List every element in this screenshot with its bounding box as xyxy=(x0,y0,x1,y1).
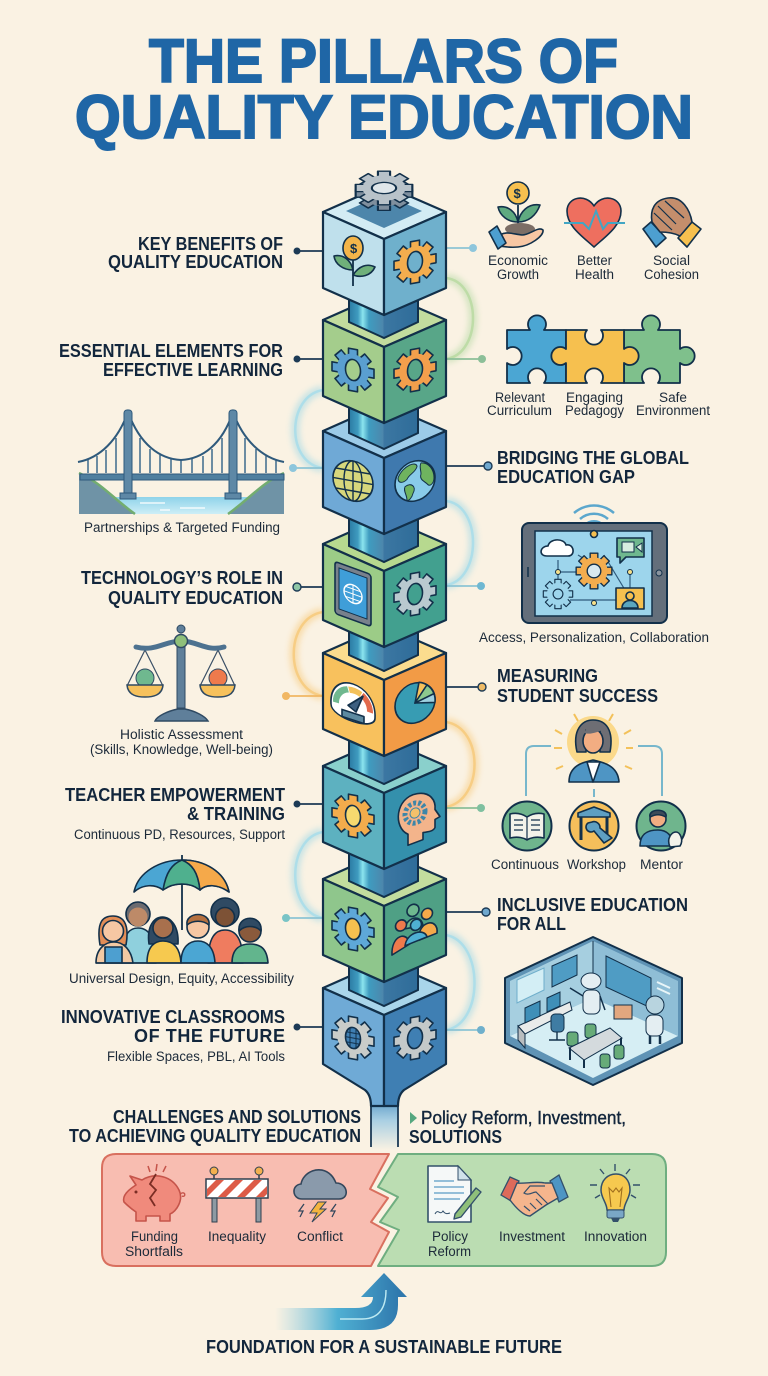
top socket xyxy=(346,194,422,228)
benefit: better health: Health xyxy=(575,267,614,282)
panel: challenges xyxy=(102,1154,389,1266)
labels: challenges: Funding xyxy=(131,1229,178,1244)
caption: holistic assessment: (Skills, Knowledge, Well-being) xyxy=(90,742,273,757)
heading: inclusive education: INCLUSIVE EDUCATION xyxy=(497,895,688,915)
icon: blue gear xyxy=(332,345,374,395)
person xyxy=(208,898,243,963)
heading: key benefits: KEY BENEFITS OF xyxy=(138,234,283,254)
icon: balance scales xyxy=(127,625,235,721)
icon: grey gear xyxy=(394,569,436,619)
icon: jigsaw puzzle xyxy=(507,315,695,383)
labels: challenges: Conflict xyxy=(297,1229,343,1244)
benefit: economic growth: Growth xyxy=(497,267,539,282)
pillar column segment xyxy=(349,625,418,671)
icon: open book badge xyxy=(502,802,552,850)
icon: suspension bridge xyxy=(78,410,284,514)
icon: gear xyxy=(394,1013,436,1063)
labels: solutions: Policy xyxy=(432,1229,468,1244)
icon: workshop badge xyxy=(570,802,618,850)
title: THE PILLARS OF xyxy=(149,27,618,95)
heading: key benefits: QUALITY EDUCATION xyxy=(108,252,283,272)
labels: puzzle elements: Curriculum xyxy=(487,403,552,418)
pillar column segment xyxy=(349,290,418,338)
heading: technology: TECHNOLOGY’S ROLE IN xyxy=(81,568,283,588)
person xyxy=(122,902,156,963)
labels: solutions: Innovation xyxy=(584,1229,647,1244)
icon: broken piggy bank xyxy=(124,1164,185,1221)
heading: inclusive education xyxy=(497,895,688,934)
icon: orange gear xyxy=(394,345,436,395)
heading: measuring success: STUDENT SUCCESS xyxy=(497,686,658,706)
caption: bridge: Partnerships & Targeted Funding xyxy=(84,520,280,535)
icon: isometric future classroom xyxy=(505,937,682,1085)
benefit: economic growth: Economic xyxy=(488,253,548,268)
heading: challenges and solutions: TO ACHIEVING QUALITY EDUCATION xyxy=(69,1126,361,1146)
pillar column segment xyxy=(349,960,418,1006)
person xyxy=(147,917,181,963)
heading: measuring success: MEASURING xyxy=(497,666,598,686)
arrow: up to solutions xyxy=(275,1273,407,1330)
pillar cube 4: technology xyxy=(323,517,446,647)
title xyxy=(75,27,693,151)
heading: bridging the gap: EDUCATION GAP xyxy=(497,467,635,487)
title: QUALITY EDUCATION xyxy=(75,83,693,151)
glowing side loops xyxy=(294,278,474,1030)
labels: solutions: Reform xyxy=(428,1244,471,1259)
pillar cube 1: key benefits xyxy=(323,185,446,315)
panel: solutions xyxy=(378,1154,666,1266)
pillar cube 2: essential elements xyxy=(323,293,446,423)
pillar cube 3: global gap xyxy=(323,404,446,534)
icon: gear with light xyxy=(332,904,374,954)
heading: solutions: Policy Reform, Investment, xyxy=(421,1108,626,1128)
labels: solutions xyxy=(428,1229,647,1259)
labels: solutions: Investment xyxy=(499,1229,565,1244)
pillar cube 6: teacher empowerment xyxy=(323,739,446,869)
caption: holistic assessment: Holistic Assessment xyxy=(120,727,243,742)
labels: puzzle elements: Engaging xyxy=(566,390,623,405)
icon: policy document xyxy=(428,1166,481,1222)
caption: universal design: Universal Design, Equity, Accessibility xyxy=(69,971,294,986)
heading: innovative classrooms xyxy=(61,1007,285,1064)
labels: puzzle elements: Relevant xyxy=(495,390,545,405)
icon: wireframe globe xyxy=(333,457,373,505)
icon: storm cloud xyxy=(294,1170,346,1222)
icon: pie chart xyxy=(395,679,435,727)
pillar cube 5: measuring success xyxy=(323,626,446,756)
pillar column segment xyxy=(349,735,418,784)
heading: innovative classrooms: Flexible Spaces, PBL, AI Tools xyxy=(107,1049,285,1064)
labels: challenges: Inequality xyxy=(208,1229,266,1244)
heading: essential elements: EFFECTIVE LEARNING xyxy=(103,360,283,380)
icon: money plant: $ xyxy=(350,241,358,256)
icon: handshake xyxy=(501,1175,568,1216)
icon: lightbulb xyxy=(590,1164,640,1222)
icon: top gear xyxy=(356,171,412,210)
benefit: social cohesion xyxy=(643,198,701,282)
icon: teacher network xyxy=(502,714,686,850)
heading: solutions: SOLUTIONS xyxy=(409,1127,502,1147)
labels: puzzle elements xyxy=(487,390,710,418)
labels: challenges xyxy=(125,1229,343,1259)
heading: innovative classrooms: OF THE FUTURE xyxy=(134,1026,285,1046)
person xyxy=(232,918,268,963)
labels: teacher network: Workshop xyxy=(567,857,626,872)
heading: bridging the gap xyxy=(497,448,689,487)
heading: technology xyxy=(81,568,283,608)
heading: challenges and solutions xyxy=(69,1107,361,1146)
icon: heart with pulse xyxy=(564,198,625,247)
icon: head with gear xyxy=(398,790,440,847)
benefit: social cohesion: Social xyxy=(653,253,690,268)
icon: globe gear xyxy=(332,1013,374,1063)
icon: gear with lightbulb xyxy=(332,791,374,841)
heading: technology: QUALITY EDUCATION xyxy=(108,588,283,608)
labels: puzzle elements: Pedagogy xyxy=(565,403,624,418)
heading: innovative classrooms: INNOVATIVE CLASSROOMS xyxy=(61,1007,285,1027)
icon: group of people xyxy=(392,900,437,955)
icon: clasped hands xyxy=(643,198,701,247)
labels: teacher network: Mentor xyxy=(640,857,684,872)
heading: solutions xyxy=(409,1108,626,1147)
heading: teacher empowerment: Continuous PD, Resources, Support xyxy=(74,827,285,842)
labels: puzzle elements: Safe xyxy=(659,390,687,405)
labels: teacher network xyxy=(491,857,684,872)
labels: challenges: Shortfalls xyxy=(125,1244,183,1259)
person xyxy=(96,916,133,963)
heading: essential elements: ESSENTIAL ELEMENTS FOR xyxy=(59,341,283,361)
pillar column segment xyxy=(349,850,418,897)
icon: orange gear xyxy=(394,237,436,287)
icon: tablet network xyxy=(522,506,667,623)
caption: holistic assessment xyxy=(90,727,273,757)
benefit: economic growth xyxy=(488,182,548,282)
icon: tablet xyxy=(335,561,371,627)
labels: puzzle elements: Environment xyxy=(636,403,710,418)
benefit: better health xyxy=(564,198,625,282)
icon: gauge xyxy=(331,677,375,729)
pillar column segment xyxy=(349,512,418,562)
connector lines and dots xyxy=(282,244,492,1034)
icon: plant in hand: $ xyxy=(514,186,522,201)
heading: measuring success xyxy=(497,666,658,706)
pillar column segment xyxy=(349,400,418,449)
heading: inclusive education: FOR ALL xyxy=(497,914,566,934)
heading: essential elements xyxy=(59,341,283,380)
heading: bridging the gap: BRIDGING THE GLOBAL xyxy=(497,448,689,468)
pillar cube 8: innovative classrooms xyxy=(323,961,446,1106)
icon: earth xyxy=(395,457,435,505)
icon: umbrella over diverse students xyxy=(96,855,268,963)
icon: mentor badge xyxy=(636,802,686,850)
benefit: better health: Better xyxy=(577,253,612,268)
person xyxy=(181,914,215,963)
heading: teacher empowerment: TEACHER EMPOWERMENT xyxy=(65,785,285,805)
icon: road barricade xyxy=(206,1167,268,1222)
labels: teacher network: Continuous xyxy=(491,857,559,872)
pillar cube 7: inclusive education xyxy=(323,852,446,982)
heading: key benefits xyxy=(108,234,283,272)
footer: foundation: FOUNDATION FOR A SUSTAINABLE FUTURE xyxy=(206,1337,562,1357)
bottom pipe of the pillar xyxy=(371,1096,398,1150)
benefit: social cohesion: Cohesion xyxy=(644,267,699,282)
heading: teacher empowerment xyxy=(65,785,285,842)
heading: challenges and solutions: CHALLENGES AND SOLUTIONS xyxy=(113,1107,361,1127)
heading: teacher empowerment: & TRAINING xyxy=(187,804,285,824)
caption: tablet: Access, Personalization, Collaboration xyxy=(479,630,709,645)
